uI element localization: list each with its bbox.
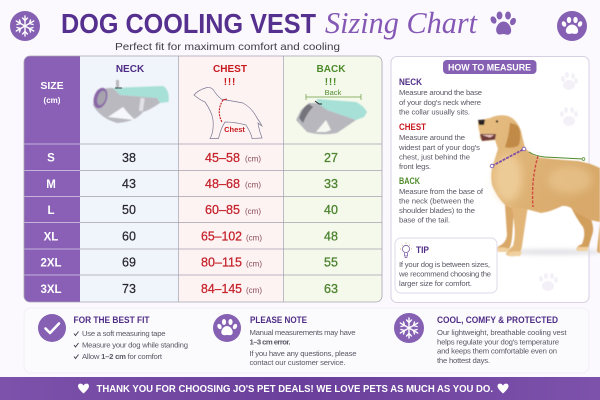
row 2XL: 2XL: [40, 258, 62, 270]
size column header: (cm): [44, 96, 61, 105]
cool, comfy and protected: helps regulate your dog's temperature: [437, 338, 559, 346]
row M: 43: [122, 177, 136, 191]
heading pill: HOW TO MEASURE: [448, 62, 531, 72]
icon: faint paw 1: [561, 72, 578, 90]
title: [61, 5, 478, 40]
callout: tip: If your dog is between sizes,: [399, 260, 490, 269]
please note: [213, 314, 356, 367]
callout: tip: larger size for comfort.: [399, 279, 472, 288]
footer banner: THANK YOU FOR CHOOSING JO'S PET DEALS! WE LOVE PETS AS MUCH AS YOU DO.: [96, 383, 493, 395]
chest measure line: [533, 156, 538, 207]
row 2XL: (cm): [246, 260, 262, 268]
text: neck: Measure around the base: [399, 88, 482, 97]
chest column header: !!!: [224, 77, 236, 88]
row 2XL: 55: [324, 256, 338, 270]
panel: bottom tips: [24, 308, 589, 373]
row S: 38: [122, 151, 136, 165]
row S: 27: [324, 151, 338, 165]
row M: 33: [324, 177, 338, 191]
chest dog outline: Chest: [224, 125, 245, 134]
back column header: !!!: [325, 77, 337, 88]
text: chest: CHEST: [399, 122, 426, 133]
row M: 48–68: [205, 177, 240, 191]
text: neck: the collar usually sits.: [399, 108, 470, 116]
icon: light bulb: [400, 242, 412, 258]
row L: 60–85: [205, 203, 240, 217]
row M: M: [46, 179, 56, 191]
row M: (cm): [245, 180, 261, 190]
text: back: base of the tail.: [399, 216, 450, 224]
chest column header: CHEST: [213, 64, 247, 75]
row 2XL: [40, 256, 338, 270]
row 3XL: [40, 282, 338, 296]
text: back: the neck (between the: [399, 196, 474, 206]
title: Sizing Chart: [325, 5, 478, 40]
for the best fit: Measure your dog while standing: [82, 340, 188, 350]
callout: tip: TIP: [416, 245, 430, 256]
back vest image: [296, 88, 367, 134]
subtitle: Perfect fit for maximum comfort and cooling: [115, 41, 340, 53]
text: back: BACK: [399, 176, 420, 187]
row XL: XL: [44, 232, 58, 244]
back column header: [317, 64, 346, 88]
icon: check badge: [38, 314, 66, 342]
row 3XL: 84–145: [201, 282, 242, 296]
chest dog outline: [194, 87, 262, 138]
text: back: [399, 176, 484, 224]
cool, comfy and protected: [394, 313, 567, 365]
row XL: 65–102: [201, 230, 242, 244]
icon: snowflake badge: [10, 11, 40, 41]
please note: PLEASE NOTE: [250, 315, 307, 326]
row L: 50: [122, 203, 136, 217]
row 2XL: 69: [122, 256, 136, 270]
row M: [46, 177, 338, 191]
sizing table: [24, 56, 382, 302]
row L: 40: [324, 203, 338, 217]
row XL: 60: [122, 230, 136, 244]
row L: [47, 203, 338, 217]
for the best fit: Allow 1–2 cm for comfort: [82, 352, 163, 361]
callout: tip: we recommend choosing the: [398, 270, 491, 278]
cool, comfy and protected: the hottest days.: [437, 356, 490, 365]
row 3XL: 73: [122, 282, 136, 296]
for the best fit: [38, 314, 188, 361]
cool, comfy and protected: Our lightweight, breathable cooling vest: [437, 328, 567, 337]
dog legs: [497, 205, 600, 256]
cool, comfy and protected: and keeps them comfortable even on: [437, 346, 557, 356]
illustration: golden retriever: [478, 115, 600, 256]
for the best fit: Use a soft measuring tape: [82, 329, 166, 338]
icon: faint paw 2: [560, 107, 578, 126]
back column header: BACK: [317, 64, 346, 75]
text: back: Measure from the base of: [399, 187, 484, 196]
row XL: (cm): [246, 234, 262, 242]
heading pill: [443, 60, 536, 74]
neck measure line: [490, 147, 526, 168]
text: chest: chest, just behind the: [399, 152, 470, 162]
back measure line: [529, 152, 585, 160]
row S: 45–58: [205, 151, 240, 165]
please note: 1–3 cm error.: [250, 338, 290, 346]
row XL: [44, 230, 338, 244]
title: DOG COOLING VEST: [61, 8, 316, 39]
size column header: SIZE: [40, 80, 64, 92]
text: chest: Measure around the: [399, 133, 465, 142]
row L: L: [47, 205, 55, 217]
row L: (cm): [245, 207, 261, 216]
callout: tip: [395, 238, 497, 293]
row S: [47, 151, 338, 165]
text: chest: front legs.: [399, 162, 431, 171]
icon: heart left: [78, 384, 89, 394]
row 3XL: 63: [324, 282, 338, 296]
back vest image: Back: [325, 88, 342, 97]
please note: contact our customer service.: [250, 358, 346, 367]
row S: (cm): [245, 154, 261, 164]
text: chest: widest part of your dog's: [398, 143, 480, 152]
icon: title paw: [489, 12, 517, 35]
cool, comfy and protected: COOL, COMFY & PROTECTED: [437, 315, 558, 326]
row S: S: [47, 152, 55, 164]
text: neck: of your dog's neck where: [399, 98, 481, 107]
icon: paw badge: [213, 314, 241, 342]
chest column header: [213, 64, 247, 88]
icon: paw badge: [557, 11, 587, 41]
text: neck: [399, 77, 482, 116]
text: back: shoulder blades) to the: [399, 206, 475, 215]
neck vest image: [91, 80, 169, 123]
please note: If you have any questions, please: [250, 349, 356, 358]
please note: Manual measurements may have: [250, 328, 356, 337]
text: neck: NECK: [399, 77, 422, 88]
row 3XL: (cm): [246, 286, 262, 295]
neck column header: NECK: [116, 64, 145, 75]
icon: snowflake badge: [394, 313, 424, 343]
icon: heart right: [498, 384, 508, 394]
row 3XL: 3XL: [40, 284, 62, 296]
row 2XL: 80–115: [201, 256, 242, 270]
for the best fit: FOR THE BEST FIT: [74, 315, 150, 326]
text: chest: [398, 122, 480, 171]
row XL: 48: [324, 230, 338, 244]
size column header: [40, 80, 64, 105]
panel: how to measure: [391, 56, 600, 302]
footer banner: [0, 377, 600, 400]
icon: faint paw 3: [539, 273, 558, 291]
